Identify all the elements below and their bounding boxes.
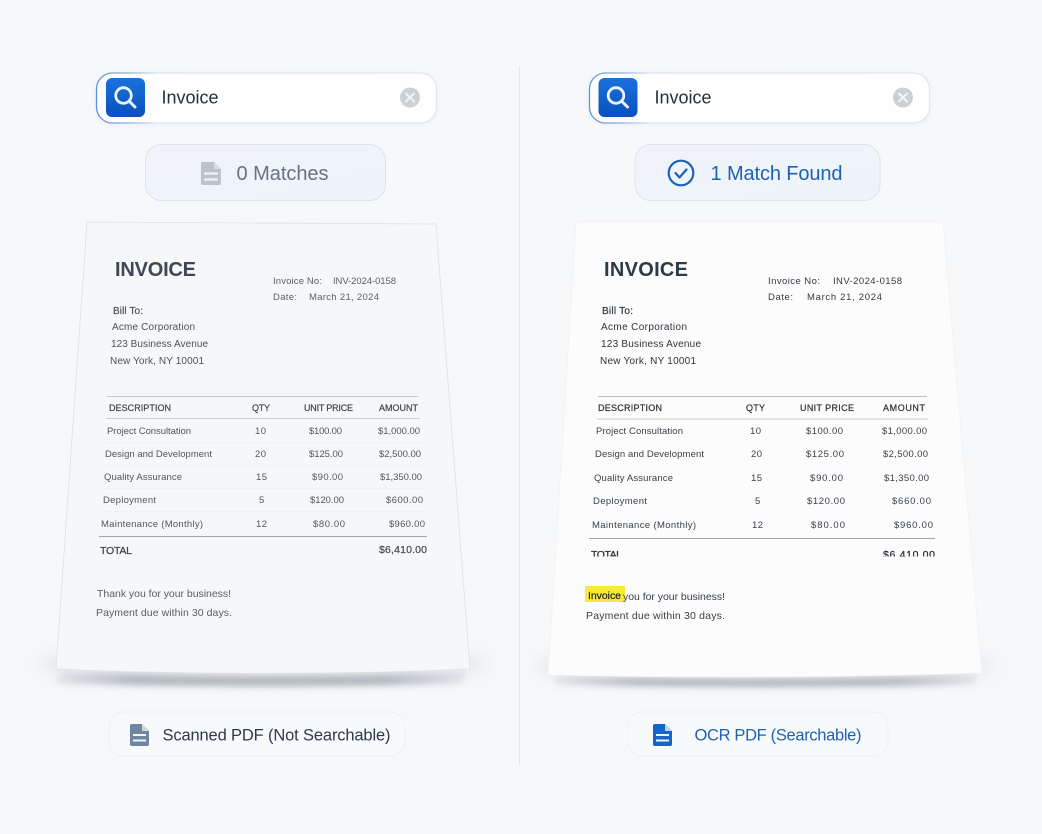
thank-you note [96, 588, 232, 619]
invoice table: $1,000.00 [378, 426, 420, 437]
label: scanned PDF [110, 712, 404, 756]
invoice table: $1,350.00 [884, 473, 929, 484]
icon: check circle [669, 161, 693, 185]
invoice table: 15 [751, 473, 762, 484]
invoice table: $2,500.00 [883, 449, 928, 460]
invoice table: $90.00 [312, 472, 343, 483]
panel: scanned PDF (not searchable) [37, 73, 489, 756]
bill to block [110, 306, 208, 367]
invoice table: $660.00 [892, 496, 931, 507]
invoice heading: INVOICE [604, 259, 688, 281]
invoice table: TOTAL [591, 549, 622, 561]
invoice table: $6,410.00 [883, 549, 935, 561]
invoice table: AMOUNT [379, 403, 418, 413]
highlighted search hit and note: you for your business! [623, 591, 725, 603]
bill to block: Bill To: [602, 306, 633, 317]
bill to block: New York, NY 10001 [110, 356, 204, 367]
invoice table: UNIT PRICE [800, 403, 854, 413]
highlighted search hit and note: Invoice [588, 590, 621, 602]
invoice table: $90.00 [810, 473, 843, 484]
invoice table: $125.00 [806, 449, 844, 460]
paper sheet [56, 222, 470, 674]
invoice table: $120.00 [807, 496, 845, 507]
icon: blue document [653, 724, 672, 746]
match status: 1 match found [635, 144, 880, 200]
invoice table: 5 [259, 495, 264, 506]
invoice number and date [768, 276, 902, 303]
bill to block: 123 Business Avenue [111, 339, 208, 350]
invoice table: $600.00 [386, 495, 423, 506]
thank-you note: Payment due within 30 days. [96, 607, 232, 619]
invoice number and date: March 21, 2024 [807, 292, 882, 303]
invoice table: AMOUNT [883, 403, 926, 413]
paper shadow [54, 672, 466, 686]
invoice table: DESCRIPTION [109, 403, 171, 413]
invoice number and date: March 21, 2024 [309, 292, 379, 303]
paper sheet [548, 222, 982, 677]
invoice number and date: INV-2024-0158 [333, 276, 396, 287]
match count text: 1 Match Found [710, 163, 842, 185]
icon: clear button [400, 88, 420, 108]
invoice table: $125.00 [309, 449, 343, 460]
invoice number and date: Invoice No: [768, 276, 820, 287]
invoice table: Design and Development [595, 449, 704, 460]
invoice number and date: Date: [273, 292, 297, 303]
invoice number and date: Invoice No: [273, 276, 322, 287]
invoice table: Quality Assurance [594, 473, 673, 484]
document: scanned invoice [37, 222, 489, 686]
search query text: Invoice [654, 88, 712, 108]
invoice table: Deployment [593, 496, 647, 507]
thank-you note: Thank you for your business! [97, 588, 231, 600]
invoice table: 12 [256, 519, 267, 530]
invoice table: Project Consultation [596, 426, 683, 437]
label: OCR PDF [628, 712, 888, 756]
bill to block: New York, NY 10001 [600, 356, 696, 367]
bill to block [600, 306, 701, 367]
label text: OCR PDF (Searchable) [694, 726, 862, 744]
invoice table: $2,500.00 [379, 449, 421, 460]
invoice table: 20 [255, 449, 266, 460]
invoice table: $960.00 [389, 519, 425, 530]
invoice table [99, 396, 427, 557]
invoice table: $120.00 [310, 495, 344, 506]
invoice table [585, 396, 940, 562]
invoice table: 12 [752, 520, 763, 531]
invoice table: 5 [755, 496, 760, 507]
invoice table: UNIT PRICE [304, 403, 353, 413]
search query text: Invoice [162, 88, 218, 108]
invoice table: 10 [750, 426, 761, 437]
invoice table: $80.00 [313, 519, 345, 530]
invoice heading: INVOICE [115, 259, 196, 281]
invoice table: Quality Assurance [104, 472, 182, 483]
invoice table: $960.00 [894, 520, 933, 531]
invoice table: $1,000.00 [882, 426, 927, 437]
icon: grey document [201, 162, 221, 185]
invoice table: DESCRIPTION [598, 403, 662, 413]
invoice table: Design and Development [105, 449, 212, 460]
invoice table: TOTAL [100, 545, 132, 557]
icon: search magnifier [106, 78, 145, 117]
bill to block: 123 Business Avenue [601, 339, 701, 350]
invoice table: $80.00 [811, 520, 845, 531]
icon: slate document [130, 724, 149, 746]
icon: clear button [893, 88, 913, 108]
icon: search magnifier [598, 78, 638, 117]
invoice number and date: INV-2024-0158 [833, 276, 902, 287]
highlighted search hit and note [585, 586, 725, 622]
invoice table: Deployment [103, 495, 156, 506]
search bar: left [96, 73, 436, 123]
invoice table: QTY [252, 403, 270, 413]
highlighted search hit and note: Payment due within 30 days. [586, 610, 725, 622]
invoice table: 10 [255, 426, 266, 437]
invoice table: 15 [256, 472, 267, 483]
label text: Scanned PDF (Not Searchable) [162, 726, 390, 744]
match count text: 0 Matches [236, 163, 328, 185]
paper shadow [554, 675, 978, 687]
highlight: Invoice [585, 586, 625, 602]
invoice table: $100.00 [309, 426, 342, 437]
invoice table: $100.00 [806, 426, 843, 437]
invoice table: 20 [751, 449, 762, 460]
match status: 0 matches [146, 144, 386, 200]
invoice table: Maintenance (Monthly) [101, 519, 203, 530]
invoice table: Maintenance (Monthly) [592, 520, 696, 531]
invoice table: $1,350.00 [380, 472, 422, 483]
invoice number and date [273, 276, 396, 303]
invoice table: $6,410.00 [379, 544, 427, 556]
panel: OCR PDF (searchable) [535, 73, 995, 756]
search bar: right [590, 73, 930, 123]
document: OCR invoice [535, 222, 995, 687]
invoice number and date: Date: [768, 292, 793, 303]
invoice table: QTY [746, 403, 765, 413]
bill to block: Acme Corporation [112, 322, 195, 333]
bill to block: Acme Corporation [601, 322, 687, 333]
bill to block: Bill To: [113, 306, 143, 317]
invoice table: Project Consultation [107, 426, 191, 437]
page clip over lower edge of total row [585, 556, 940, 562]
